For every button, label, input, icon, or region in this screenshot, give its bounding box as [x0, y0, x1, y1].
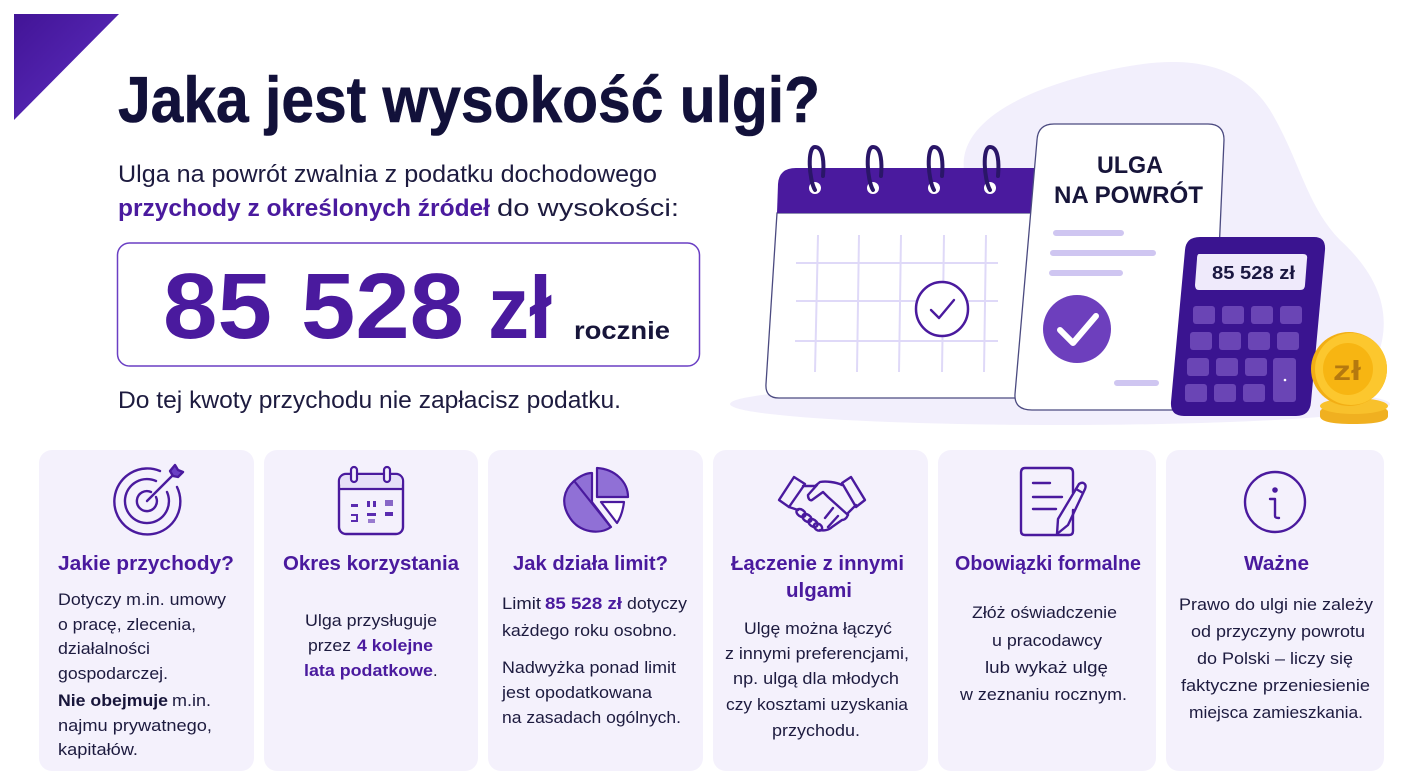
body text: Limit [502, 595, 541, 613]
body text: w zeznaniu rocznym. [959, 686, 1127, 704]
document [1015, 124, 1224, 410]
heading: Okres korzystania [283, 552, 460, 575]
body text: z innymi preferencjami, [725, 645, 909, 663]
body text: od przyczyny powrotu [1191, 623, 1365, 641]
body text: każdego roku osobno. [502, 622, 677, 640]
amount box [118, 243, 700, 366]
body text: 85 528 zł [545, 595, 622, 613]
body text: Dotyczy m.in. umowy [58, 591, 227, 609]
panel: Ważne [1166, 450, 1384, 771]
body text: 4 kolejne [357, 637, 433, 655]
panel: Okres korzystania [264, 450, 478, 771]
body text [501, 595, 688, 727]
body text: lub wykaż ulgę [985, 659, 1108, 677]
heading: Jak działa limit? [513, 552, 668, 575]
intro text: do wysokości: [497, 195, 679, 222]
amount box: zł [488, 258, 552, 357]
body text: m.in. [172, 692, 211, 710]
illustration [730, 62, 1390, 425]
amount box: 528 [301, 254, 464, 358]
calendar [766, 147, 1040, 398]
body text: lata podatkowe [304, 662, 433, 680]
panel: Łączenie z innymi ulgami [713, 450, 928, 771]
amount box: 85 [163, 254, 272, 358]
body text: czy kosztami uzyskania [726, 696, 909, 714]
icon: pie chart [564, 468, 628, 532]
body text: jest opodatkowana [501, 684, 653, 702]
intro text: Ulga na powrót zwalnia z podatku dochodowego [118, 161, 657, 188]
note under box: Do tej kwoty przychodu nie zapłacisz podatku. [118, 387, 621, 414]
heading [731, 552, 904, 602]
heading: Obowiązki formalne [955, 552, 1141, 575]
document: ULGA [1097, 152, 1163, 179]
body text: Nie obejmuje [58, 692, 168, 710]
intro text [118, 161, 679, 222]
body text: faktyczne przeniesienie [1181, 677, 1370, 695]
body text: na zasadach ogólnych. [502, 709, 681, 727]
heading: Łączenie z innymi [731, 552, 904, 575]
body text: najmu prywatnego, [58, 717, 212, 735]
amount box: rocznie [574, 317, 670, 345]
icon: calendar [339, 467, 403, 534]
body text: . [433, 662, 438, 680]
calculator: 85 528 zł [1212, 263, 1295, 283]
body text [304, 612, 438, 680]
body text [58, 591, 227, 759]
heading: ulgami [786, 579, 852, 602]
body text: Złóż oświadczenie [972, 604, 1117, 622]
body text: działalności [58, 640, 150, 658]
body text: miejsca zamieszkania. [1189, 704, 1363, 722]
body text: Ulgę można łączyć [744, 620, 892, 638]
body text: dotyczy [627, 595, 688, 613]
coins [1311, 332, 1388, 424]
ground shadow [730, 383, 1390, 425]
body text: Ulga przysługuje [305, 612, 437, 630]
body text: Prawo do ulgi nie zależy [1179, 596, 1374, 614]
body text: do Polski – liczy się [1197, 650, 1353, 668]
icon: target [114, 465, 183, 534]
body text: Nadwyżka ponad limit [502, 659, 676, 677]
panel: Jakie przychody [39, 450, 254, 771]
corner triangle [14, 14, 119, 120]
document: NA POWRÓT [1054, 181, 1203, 209]
body text: przez [308, 637, 351, 655]
body text [725, 620, 909, 740]
body text: kapitałów. [58, 741, 138, 759]
intro text: przychody z określonych źródeł [118, 195, 490, 222]
title: Jaka jest wysokość ulgi? [118, 63, 820, 136]
heading: Jakie przychody? [58, 552, 234, 575]
calculator [1171, 237, 1325, 416]
body text [1179, 596, 1374, 722]
body text: o pracę, zlecenia, [58, 616, 196, 634]
icon: document with pen [1021, 468, 1086, 535]
icon: information [1245, 472, 1305, 532]
heading: Ważne [1244, 552, 1309, 575]
body text: np. ulgą dla młodych [733, 670, 899, 688]
body text: gospodarczej. [58, 665, 168, 683]
panel: Jak działa limit [488, 450, 703, 771]
body text: przychodu. [772, 722, 860, 740]
background blob [964, 62, 1384, 405]
icon: handshake [779, 477, 865, 532]
body text [959, 604, 1127, 704]
panel: Obowiązki formalne [938, 450, 1156, 771]
body text: u pracodawcy [992, 632, 1103, 650]
coins: zł [1333, 355, 1361, 386]
